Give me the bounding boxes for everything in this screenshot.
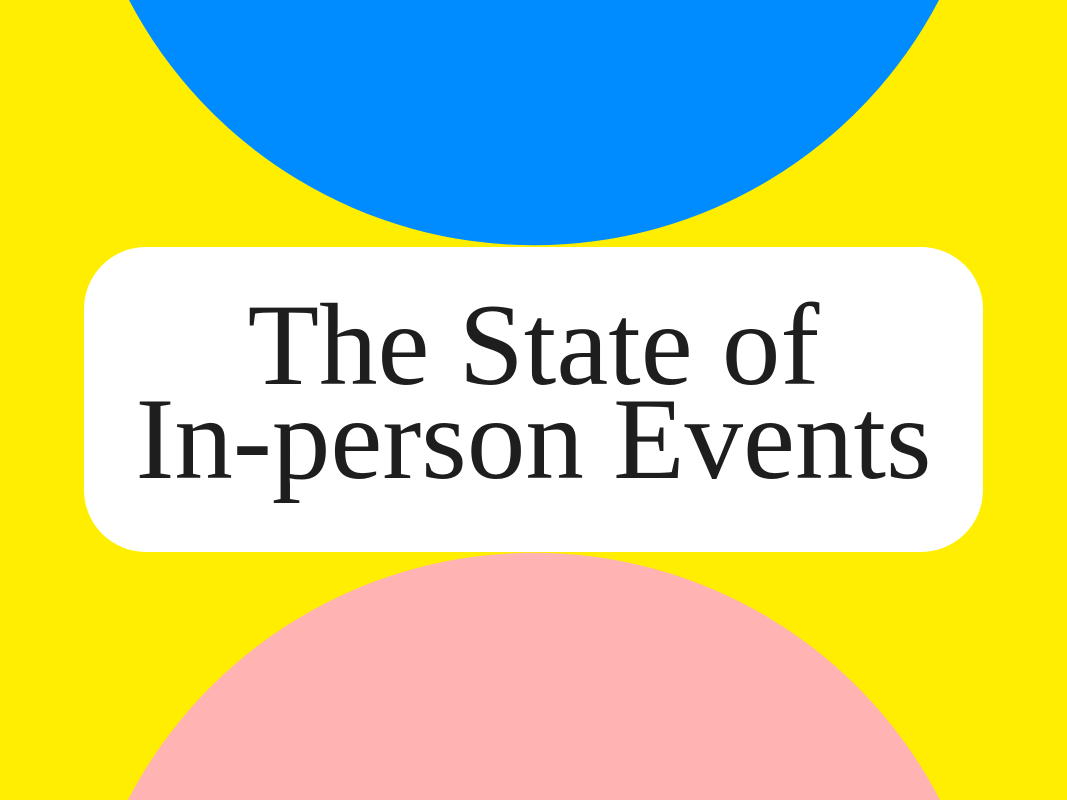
title: The State of bbox=[248, 281, 819, 410]
title bbox=[135, 281, 932, 504]
title: In-person Events bbox=[135, 375, 932, 504]
title panel bbox=[84, 247, 983, 552]
blue circle bbox=[129, 0, 939, 245]
pink circle bbox=[128, 553, 940, 800]
